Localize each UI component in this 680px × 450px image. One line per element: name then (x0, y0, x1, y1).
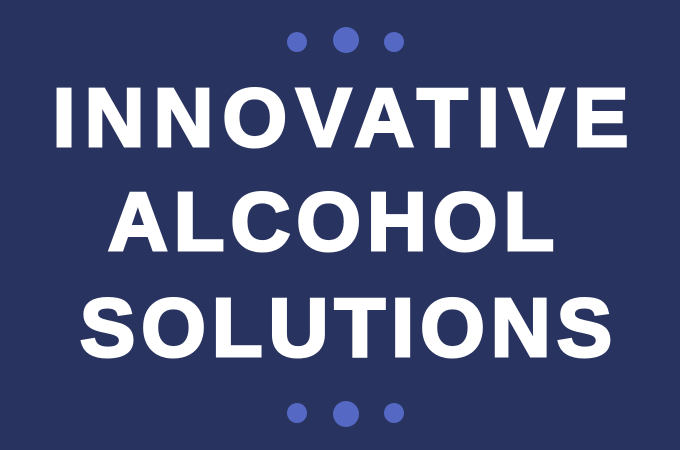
title (53, 71, 637, 374)
title line 2: ALCOHOL (108, 175, 560, 268)
title line 3: SOLUTIONS (80, 281, 618, 374)
title line 1: INNOVATIVE (53, 71, 637, 164)
top dots (287, 27, 404, 53)
bottom dots (287, 401, 404, 427)
